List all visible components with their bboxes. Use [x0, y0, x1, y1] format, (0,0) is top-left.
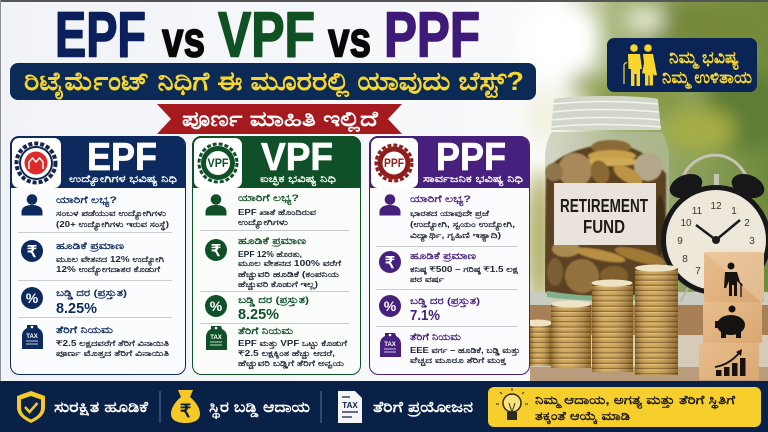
title: vs: [328, 12, 371, 68]
icon: VPF seal: VPF: [208, 158, 228, 170]
row: investment amount: ಹೂಡಿಕೆ ಪ್ರಮಾಣ: [56, 241, 124, 253]
EPF header: [10, 136, 185, 188]
row: who is eligible: ಸಂಬಳ ಪಡೆಯುವ ಉದ್ಯೋಗಿಗಳು: [56, 209, 167, 220]
icon: tax document: TAX: [342, 401, 358, 410]
row: tax rules: [206, 326, 348, 370]
icon: elderly couple: [624, 44, 657, 86]
icon: PPF seal: [376, 145, 412, 181]
title: EPF: [55, 0, 146, 70]
ribbon: full information here: [157, 104, 402, 134]
alarm clock: 9: [677, 236, 683, 247]
row: tax rules: TAX: [210, 335, 222, 341]
row: interest rate: ಬಡ್ಡಿ ದರ (ಪ್ರಸ್ತುತ): [56, 288, 127, 300]
row: tax rules: ₹2.5 ಲಕ್ಷಕ್ಕಿಂತ ಹೆಚ್ಚು ಆದರೆ,: [237, 349, 335, 360]
row: investment amount: [205, 236, 342, 291]
row: investment amount: EPF 12% ಹೊರತು,: [238, 250, 302, 259]
row: interest rate: %: [210, 298, 223, 314]
title: [55, 0, 480, 70]
row: tax rules: ತೆರಿಗೆ ನಿಯಮ: [56, 325, 114, 336]
VPF header: ಐಚ್ಛಿಕ ಭವಿಷ್ಯ ನಿಧಿ: [260, 174, 337, 187]
row: tax rules: TAX: [384, 342, 396, 348]
block: piggy bank: [703, 302, 762, 343]
callout: your future: ನಿಮ್ಮ ಭವಿಷ್ಯ: [669, 48, 739, 71]
alarm clock: 10: [680, 218, 692, 229]
row: who is eligible: ಯಾರಿಗೆ ಲಭ್ಯ?: [410, 194, 471, 207]
icon: money bag: ₹: [180, 401, 192, 421]
row: investment amount: ₹: [27, 244, 37, 261]
row: interest rate: %: [26, 290, 39, 306]
row: interest rate: [205, 295, 309, 323]
title: PPF: [384, 0, 480, 70]
alarm clock: 7: [695, 266, 701, 277]
row: tax rules: TAX: [26, 334, 38, 340]
alarm clock: 1: [731, 206, 737, 217]
EPF header: EPF: [87, 136, 157, 179]
block: retiree: [704, 249, 764, 302]
icon: EPFO logo: [16, 144, 56, 182]
row: investment amount: ಹೆಚ್ಚುವರಿ ಹೂಡಿಕೆ (ಕಂಪನಿಯ: [238, 270, 340, 281]
row: tax rules: EEE ವರ್ಗ – ಹೂಡಿಕೆ, ಬಡ್ಡಿ ಮತ್ತು: [410, 346, 520, 356]
row: who is eligible: ಭಾರತದ ಯಾವುದೇ ಪ್ರಜೆ: [410, 209, 490, 219]
row: who is eligible: ಯಾರಿಗೆ ಲಭ್ಯ?: [238, 193, 299, 206]
alarm clock: 2: [744, 218, 750, 229]
row: investment amount: ಹೆಚ್ಚುವರಿ ಕೊಡುಗೆ ಇಲ್ಲ): [238, 280, 318, 291]
row: investment amount: ಮೂಲ ವೇತನದ 100% ವರೆಗೆ: [238, 259, 342, 268]
icon: PPF seal: PPF: [384, 158, 404, 170]
jar of coins: [544, 96, 669, 301]
row: interest rate: [21, 287, 127, 317]
panel: VPF: [192, 136, 361, 374]
row: who is eligible: [22, 194, 169, 231]
VPF header: VPF: [261, 136, 333, 179]
row: investment amount: ₹: [385, 255, 395, 272]
PPF header: ಸಾರ್ವಜನಿಕ ಭವಿಷ್ಯ ನಿಧಿ: [423, 174, 524, 187]
alarm clock: [661, 155, 768, 302]
panel: EPF: [10, 136, 186, 374]
row: interest rate: 7.1%: [410, 308, 440, 324]
icon: light bulb: [496, 388, 528, 420]
PPF header: PPF: [436, 136, 506, 179]
row: tax rules: [22, 325, 170, 359]
row: tax rules: EPF ಮತ್ತು VPF ಒಟ್ಟು ಕೊಡುಗೆ: [238, 339, 348, 349]
row: who is eligible: [206, 193, 316, 229]
row: tax rules: ₹2.5 ಲಕ್ಷದವರೆಗೆ ತೆರಿಗೆ ವಿನಾಯಿತಿ: [55, 339, 170, 349]
PPF header: [369, 136, 529, 188]
callout: choose wisely: [488, 387, 761, 427]
jar label: FUND: [583, 217, 625, 237]
row: investment amount: ₹: [211, 243, 221, 260]
row: tax rules: ಹೆಚ್ಚುವರಿ ಬಡ್ಡಿಗೆ ತೆರಿಗೆ ಅನ್ವಯ: [238, 359, 345, 370]
callout: choose wisely: ನಿಮ್ಮ ಆದಾಯ, ಅಗತ್ಯ ಮತ್ತು ತೆರಿಗೆ ಸ್ಥಿತಿಗೆ: [535, 393, 736, 410]
icon: tax document: [338, 391, 362, 423]
label: tax benefit: ತೆರಿಗೆ ಪ್ರಯೋಜನ: [373, 399, 473, 417]
title: VPF: [218, 0, 315, 70]
row: investment amount: ಹೂಡಿಕೆ ಪ್ರಮಾಣ: [410, 251, 476, 263]
row: who is eligible: (ಉದ್ಯೋಗಿ, ಸ್ವಯಂ ಉದ್ಯೋಗಿ,: [410, 220, 515, 231]
row: investment amount: [21, 240, 165, 276]
row: investment amount: [379, 251, 519, 284]
row: interest rate: 8.25%: [238, 307, 279, 323]
icon: shield: [17, 391, 45, 423]
row: interest rate: ಬಡ್ಡಿ ದರ (ಪ್ರಸ್ತುತ): [238, 295, 309, 307]
row: tax rules: ಪೂರ್ಣ ಮೊತ್ತದ ತೆರಿಗೆ ವಿನಾಯಿತಿ: [56, 349, 170, 359]
callout: your future: [607, 38, 757, 92]
row: interest rate: [379, 295, 480, 324]
row: investment amount: ಹೂಡಿಕೆ ಪ್ರಮಾಣ: [238, 236, 306, 248]
label: stable interest income: ಸ್ಥಿರ ಬಡ್ಡಿ ಆದಾಯ: [209, 399, 310, 419]
icon: VPF seal: [199, 144, 237, 182]
row: interest rate: 8.25%: [56, 301, 97, 317]
VPF header: [192, 136, 361, 188]
jar label: [554, 183, 656, 245]
label: safe investment: ಸುರಕ್ಷಿತ ಹೂಡಿಕೆ: [54, 399, 148, 416]
ribbon: full information here: ಪೂರ್ಣ ಮಾಹಿತಿ ಇಲ್ಲಿದೆ: [182, 108, 379, 133]
row: who is eligible: ಯಾರಿಗೆ ಲಭ್ಯ?: [56, 195, 117, 208]
alarm clock: 11: [692, 206, 703, 217]
row: tax rules: ವೆಚ್ಚದ ಮೂರೂ ತೆರಿಗೆ ಮುಕ್ತ: [410, 356, 507, 366]
row: tax rules: ತೆರಿಗೆ ನಿಯಮ: [238, 326, 294, 337]
row: who is eligible: ಉದ್ಯೋಗಿಗಳು: [238, 218, 289, 229]
row: investment amount: 12% ಉದ್ಯೋಗದಾತರ ಕೊಡುಗೆ: [56, 265, 161, 276]
row: tax rules: ತೆರಿಗೆ ನಿಯಮ: [410, 332, 462, 343]
alarm clock: 8: [682, 254, 688, 265]
row: interest rate: %: [384, 298, 397, 314]
coin stacks: [524, 264, 678, 375]
alarm clock: 12: [710, 201, 722, 212]
row: investment amount: ಪರ ವರ್ಷ: [410, 275, 445, 284]
footer bar: [0, 381, 768, 432]
row: investment amount: ಕನಿಷ್ಠ ₹500 – ಗರಿಷ್ಠ ₹1.5 ಲಕ್ಷ: [410, 265, 519, 275]
panel: PPF: [369, 136, 530, 374]
EPF header: ಉದ್ಯೋಗಿಗಳ ಭವಿಷ್ಯ ನಿಧಿ: [69, 174, 178, 187]
wooden blocks: [699, 249, 764, 380]
subtitle bar: ರಿಟೈರ್ಮೆಂಟ್ ನಿಧಿಗೆ ಈ ಮೂರರಲ್ಲಿ ಯಾವುದು ಬೆಸ್ಟ್?: [24, 66, 524, 100]
callout: choose wisely: ತಕ್ಕಂತೆ ಆಯ್ಕೆ ಮಾಡಿ: [535, 409, 631, 425]
callout: your future: ನಿಮ್ಮ ಉಳಿತಾಯ: [662, 68, 752, 90]
row: who is eligible: (20+ ಉದ್ಯೋಗಿಗಳು ಇರುವ ಸಂಸ್ಥೆ): [56, 220, 169, 231]
row: interest rate: ಬಡ್ಡಿ ದರ (ಪ್ರಸ್ತುತ): [410, 296, 480, 308]
row: investment amount: ಮೂಲ ವೇತನದ 12% ಉದ್ಯೋಗಿ: [56, 255, 165, 266]
alarm clock: 3: [749, 236, 755, 247]
subtitle bar: [10, 63, 536, 100]
jar label: RETIREMENT: [560, 196, 648, 216]
title: vs: [162, 12, 205, 68]
block: growth chart: [699, 343, 759, 380]
icon: money bag: [171, 390, 200, 423]
table and shelf: [530, 292, 768, 381]
row: who is eligible: [380, 194, 515, 242]
row: who is eligible: EPF ಖಾತೆ ಹೊಂದಿರುವ: [238, 208, 316, 217]
row: who is eligible: ವಿದ್ಯಾರ್ಥಿ, ಗೃಹಿಣಿ ಇತ್ಯಾದಿ): [410, 231, 501, 242]
row: tax rules: [380, 332, 520, 366]
